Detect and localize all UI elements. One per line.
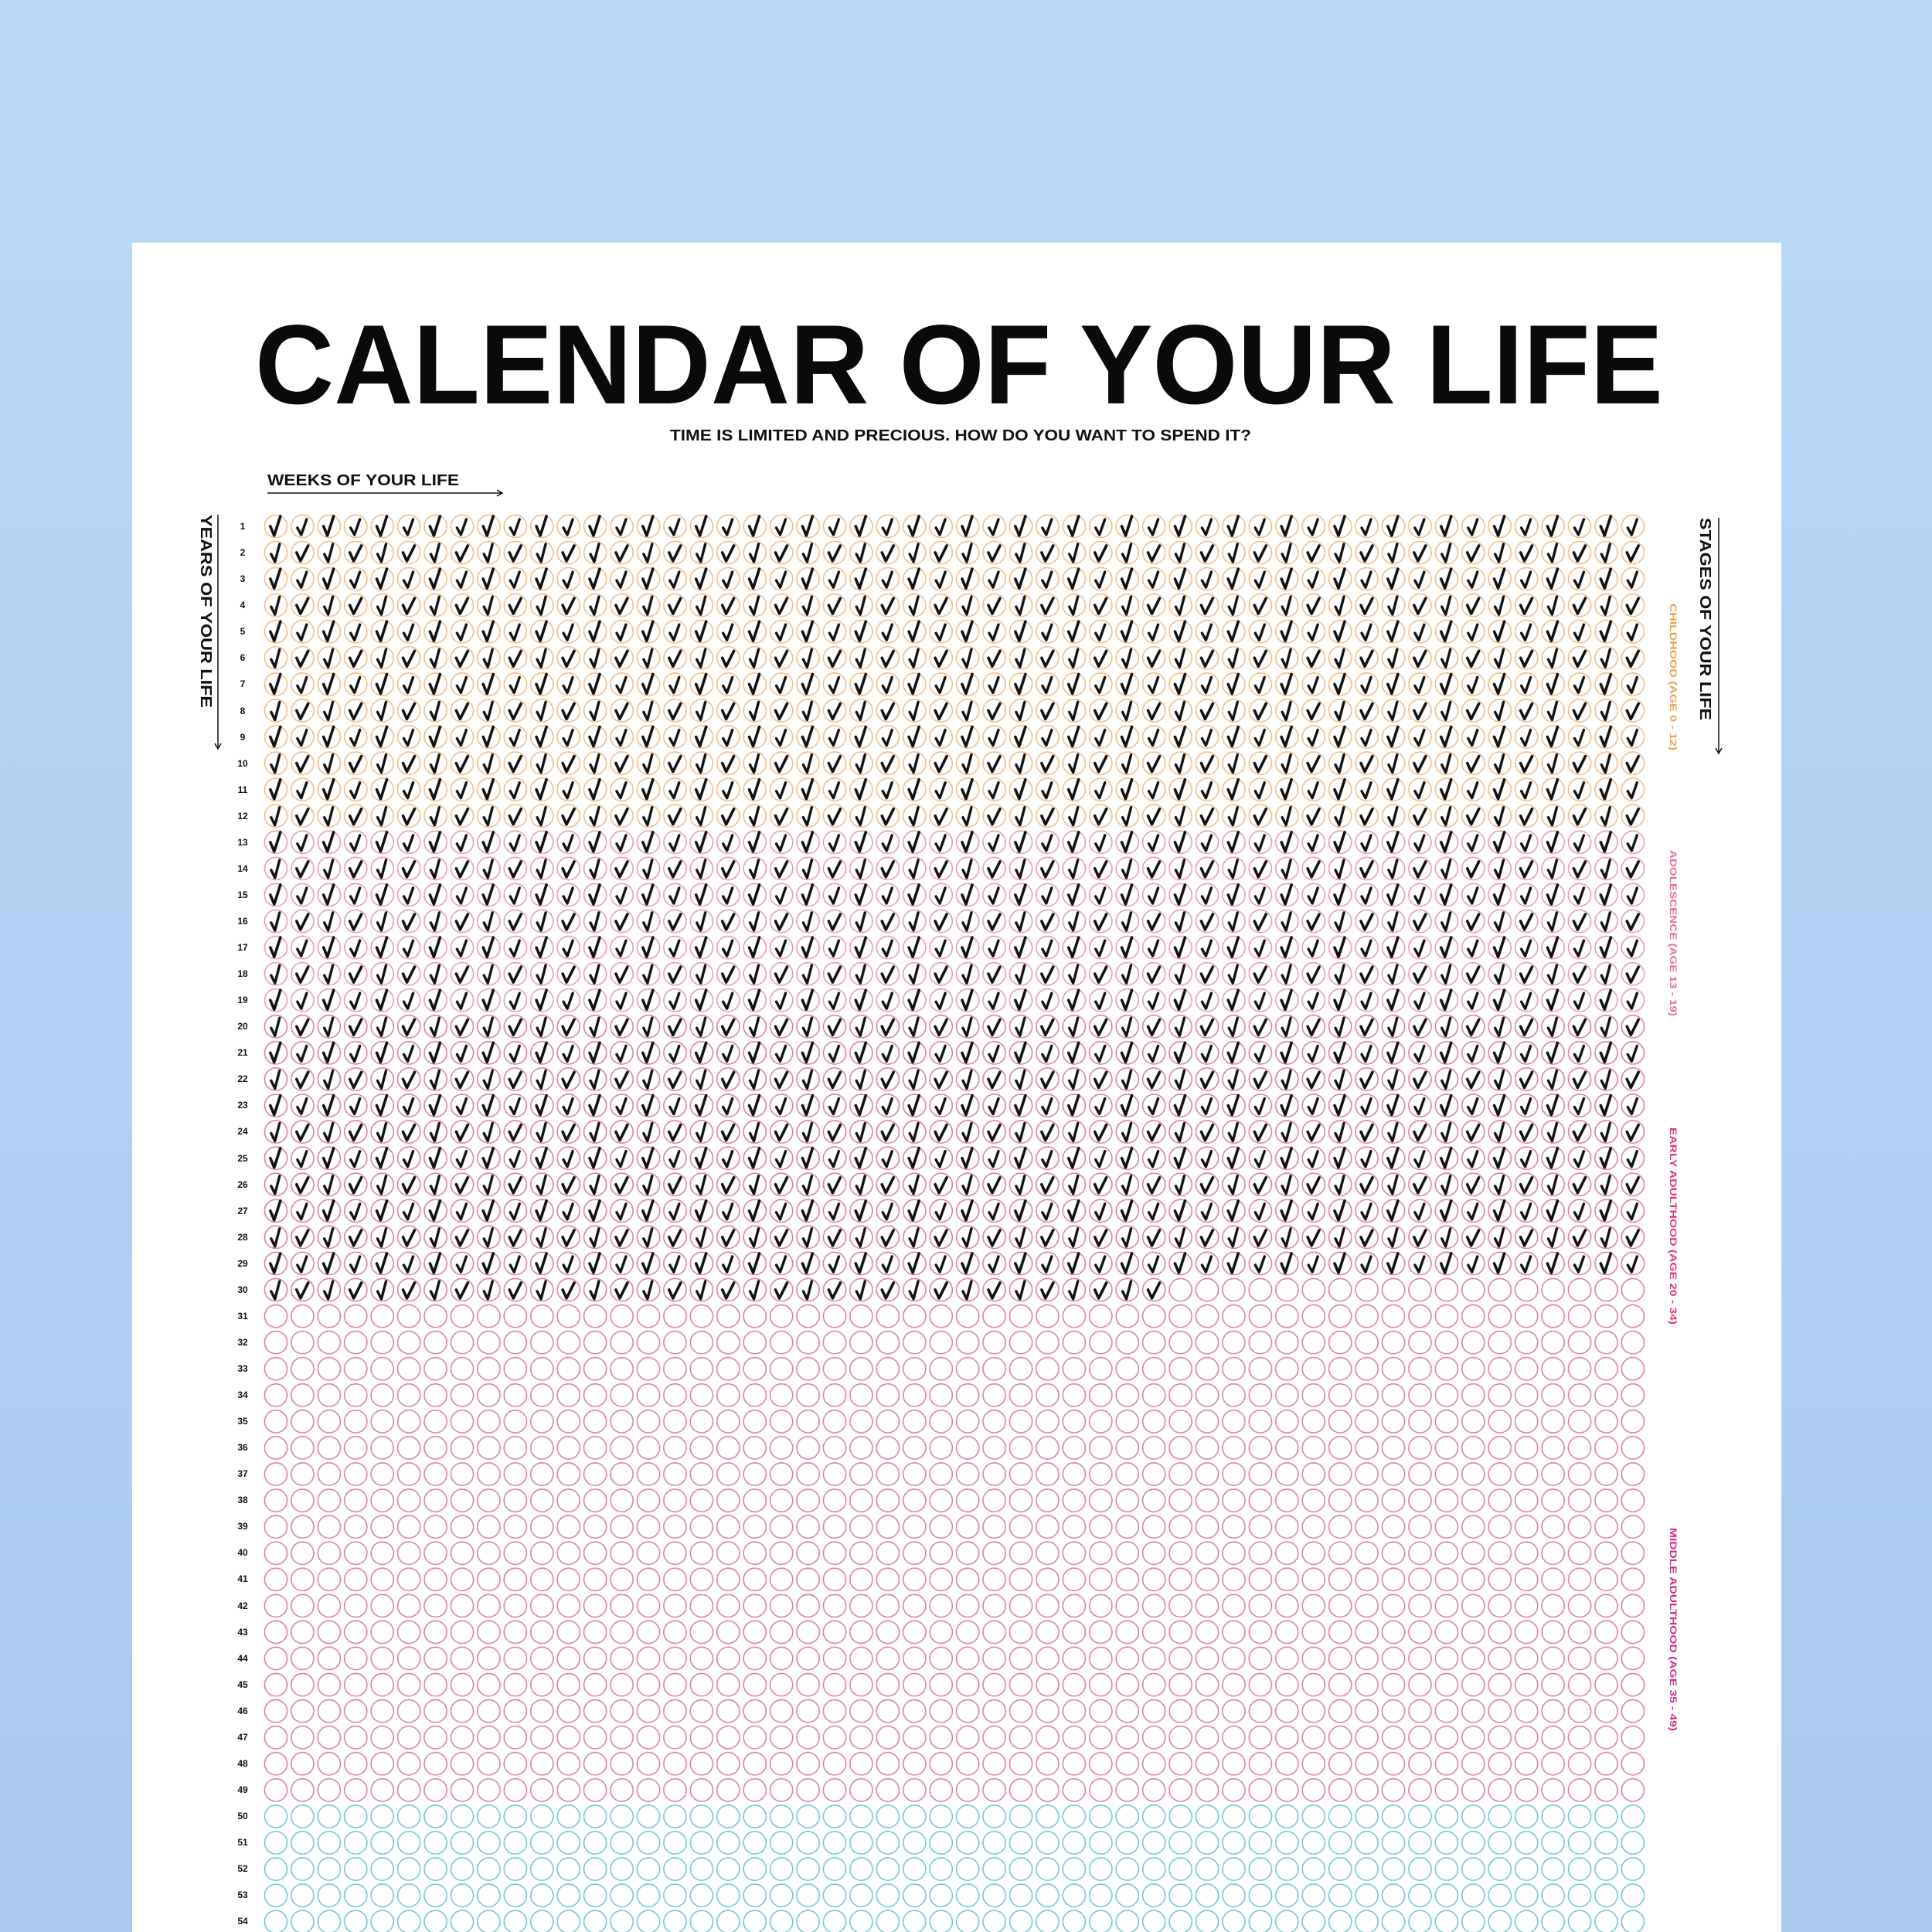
row numbers: [237, 521, 248, 1927]
row numbers: 31: [237, 1311, 248, 1321]
row numbers: 21: [237, 1047, 248, 1058]
row numbers: 28: [237, 1232, 248, 1243]
row numbers: 52: [237, 1863, 248, 1874]
stage labels: CHILDHOOD (AGE 0 - 12): [1668, 604, 1679, 750]
years axis label: YEARS OF YOUR LIFE: [197, 515, 214, 708]
weeks axis label: WEEKS OF YOUR LIFE: [267, 472, 459, 489]
row numbers: 18: [237, 968, 248, 979]
row numbers: 38: [237, 1495, 248, 1505]
row numbers: 25: [237, 1153, 248, 1164]
row numbers: 9: [240, 732, 246, 743]
row numbers: 22: [237, 1073, 248, 1084]
row numbers: 53: [237, 1889, 248, 1900]
row numbers: 32: [237, 1337, 248, 1348]
row numbers: 46: [237, 1706, 248, 1716]
row numbers: 26: [237, 1179, 248, 1190]
row numbers: 27: [237, 1206, 248, 1216]
row numbers: 8: [240, 706, 246, 716]
row numbers: 2: [240, 547, 246, 558]
stage labels: [1668, 604, 1679, 1731]
row numbers: 40: [237, 1547, 248, 1558]
subtitle: TIME IS LIMITED AND PRECIOUS. HOW DO YOU WANT TO SPEND IT?: [670, 427, 1251, 444]
row numbers: 41: [237, 1573, 248, 1584]
paper: [132, 243, 1781, 1932]
title: CALENDAR OF YOUR LIFE: [255, 301, 1663, 427]
row numbers: 54: [237, 1916, 248, 1927]
row numbers: 24: [237, 1126, 248, 1137]
row numbers: 10: [237, 758, 248, 769]
row numbers: 33: [237, 1363, 248, 1374]
row numbers: 23: [237, 1100, 248, 1111]
stages axis label: [1696, 518, 1722, 753]
row numbers: 34: [237, 1389, 248, 1400]
grid of weeks: [263, 513, 1646, 1932]
row numbers: 48: [237, 1758, 248, 1769]
row numbers: 20: [237, 1021, 248, 1032]
row numbers: 47: [237, 1732, 248, 1743]
row numbers: 1: [240, 521, 246, 532]
row numbers: 37: [237, 1468, 248, 1479]
row numbers: 29: [237, 1258, 248, 1269]
row numbers: 45: [237, 1679, 248, 1690]
row numbers: 50: [237, 1811, 248, 1821]
stages axis label: STAGES OF YOUR LIFE: [1696, 518, 1713, 720]
row numbers: 36: [237, 1442, 248, 1453]
row numbers: 11: [238, 784, 248, 795]
weeks axis label: [267, 472, 502, 496]
row numbers: 7: [240, 679, 246, 689]
row numbers: 30: [237, 1284, 248, 1295]
row numbers: 13: [237, 837, 248, 848]
row numbers: 16: [237, 916, 248, 927]
row numbers: 43: [237, 1627, 248, 1638]
row numbers: 39: [237, 1521, 248, 1532]
years axis label: [197, 515, 221, 749]
stage labels: EARLY ADULTHOOD (AGE 20 - 34): [1668, 1128, 1679, 1325]
row numbers: 6: [240, 652, 246, 663]
stage labels: ADOLESCENCE (AGE 13 - 19): [1668, 850, 1679, 1016]
row numbers: 44: [237, 1653, 248, 1664]
row numbers: 42: [237, 1600, 248, 1611]
stage labels: MIDDLE ADULTHOOD (AGE 35 - 49): [1668, 1528, 1679, 1731]
row numbers: 14: [237, 863, 248, 874]
checkmarks: lived weeks: [263, 513, 1646, 1303]
row numbers: 4: [240, 600, 246, 611]
row numbers: 17: [237, 942, 248, 953]
row numbers: 49: [237, 1784, 248, 1795]
row numbers: 51: [237, 1837, 248, 1848]
row numbers: 5: [240, 626, 246, 637]
row numbers: 35: [237, 1416, 248, 1427]
row numbers: 19: [237, 995, 248, 1005]
row numbers: 3: [240, 573, 246, 584]
row numbers: 15: [237, 889, 248, 900]
row numbers: 12: [237, 811, 248, 821]
